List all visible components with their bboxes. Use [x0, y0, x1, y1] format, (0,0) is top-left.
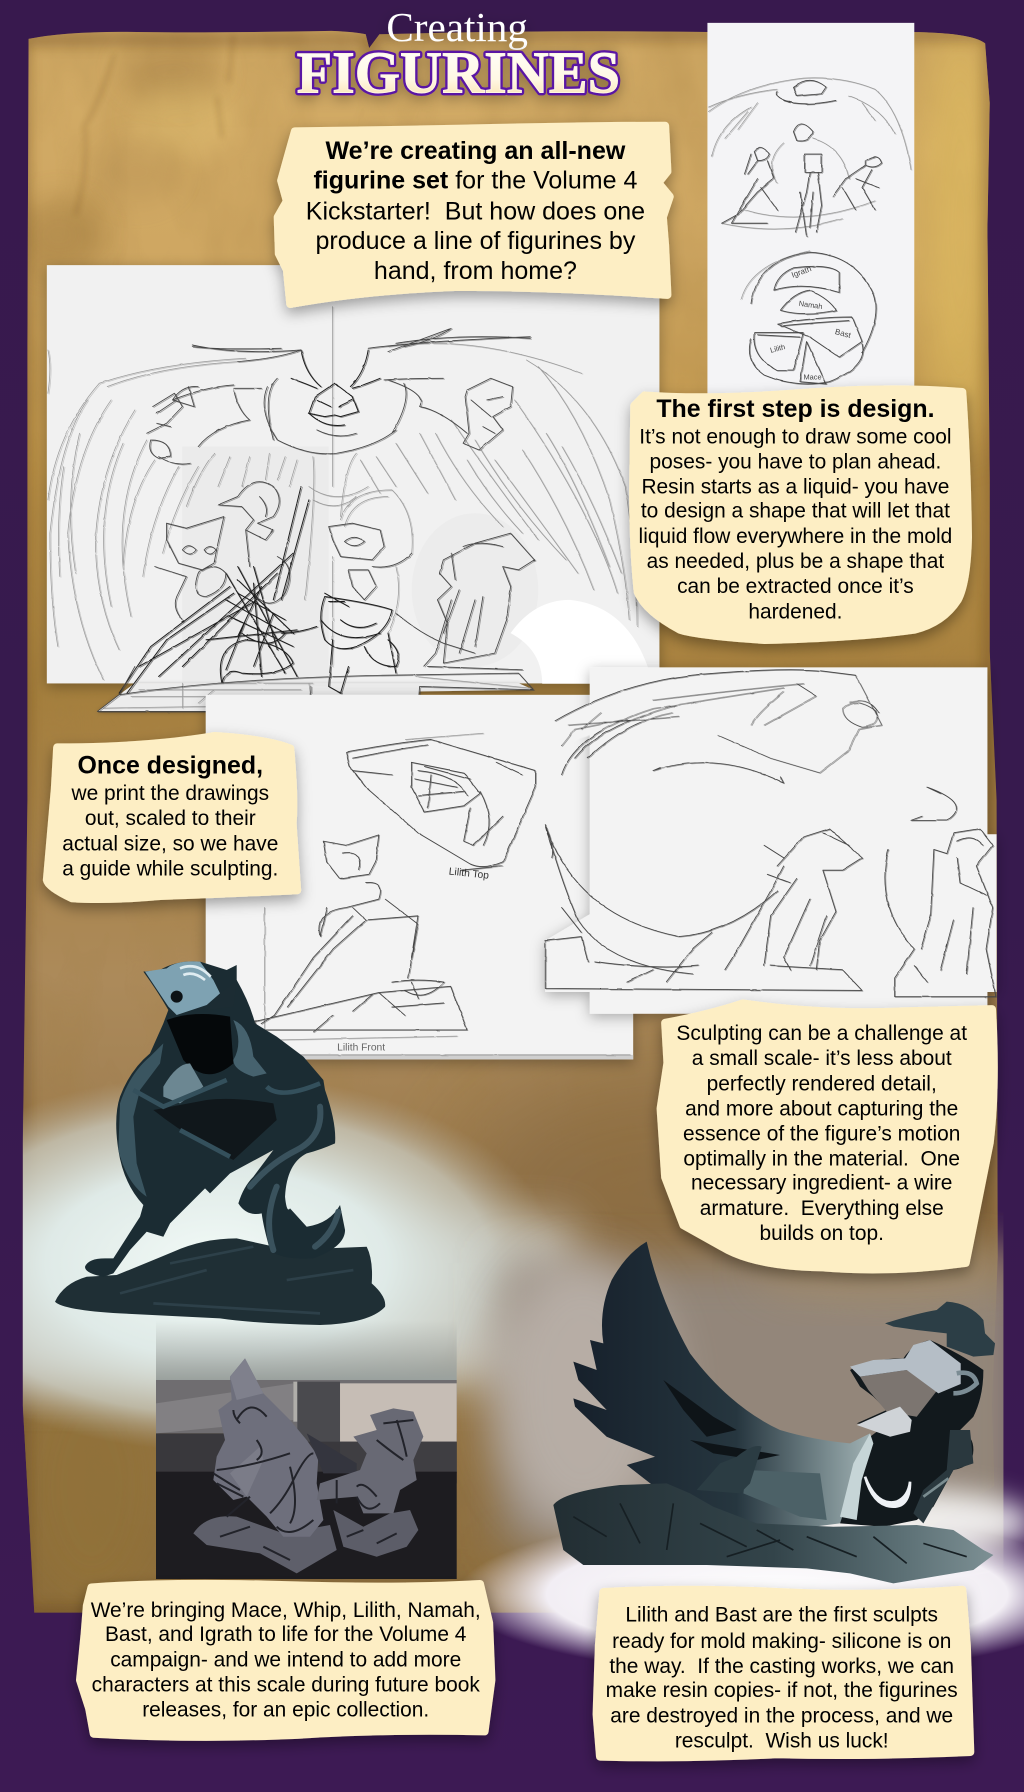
callout: once designed: out, scaled to their [85, 807, 256, 830]
callout: first step is design: as needed, plus be a shape that [647, 550, 944, 573]
sketch sheet: tall overview [707, 23, 914, 395]
sketch sheet: tall overview: Bast [834, 327, 853, 340]
sketch sheet: tall overview: Lilith [769, 342, 786, 355]
grey sculpt: right figure [317, 1408, 423, 1557]
sketch sheet: Lilith top and front: Lilith Front [337, 1042, 385, 1053]
sketch sheet: tall overview: Mace [804, 372, 822, 381]
title line: FIGURINES: FIGURINES [297, 40, 620, 106]
head [885, 1302, 995, 1357]
wing reference cut-out [555, 670, 882, 773]
sketch sheet: Lilith top and front [206, 695, 633, 1059]
callout: first sculpts ready: are destroyed in the process, and we [610, 1704, 953, 1727]
rear body [840, 1340, 983, 1527]
callout: sculpting: builds on top. [760, 1222, 884, 1245]
callout: once designed [47, 736, 297, 899]
callout: bringing characters to life [80, 1584, 491, 1737]
callout: sculpting: essence of the figure’s motion [683, 1123, 960, 1146]
callout: once designed: Once designed, [78, 752, 263, 780]
sketch sheet: tall overview: Igrath [790, 264, 813, 280]
callout: first step is design: poses- you have to plan ahead. [650, 451, 941, 474]
callout: sculpting: a small scale- it’s less about [692, 1047, 952, 1070]
crossed leg [743, 1470, 827, 1520]
clay base [553, 1483, 993, 1583]
callout: once designed: we print the drawings [71, 782, 269, 805]
sketch sheet: group design [47, 265, 659, 724]
title line: FIGURINES: FIGURINES [297, 40, 620, 106]
callout: first sculpts ready: ready for mold making- silicone is on [612, 1630, 951, 1653]
photo glow: sculpt left backdrop [0, 1074, 571, 1451]
callout: first sculpts ready: make resin copies- if not, the figurines [606, 1679, 958, 1702]
callout: sculpting [661, 1003, 994, 1269]
callout: intro [278, 126, 670, 304]
shaded neck [167, 1014, 233, 1074]
horned head [291, 350, 380, 426]
sketch sheet: group design: Billing/Base [225, 702, 273, 714]
callout: sculpting: perfectly rendered detail, [707, 1072, 937, 1095]
sketch sheet: Lilith top and front: Lilith Top [448, 867, 490, 882]
title [297, 4, 620, 106]
title line: Creating: Creating [386, 4, 528, 50]
callout: first sculpts ready: Lilith and Bast are the first sculpts [625, 1604, 938, 1627]
callout: intro: hand, from home? [374, 257, 577, 285]
callout: intro: Kickstarter! But how does one [306, 197, 645, 225]
lit head [145, 961, 220, 1015]
sculpt: standing figure with base [55, 961, 385, 1325]
callout: bringing characters to life: Bast, and Igrath to life for the Volume 4 [105, 1623, 467, 1646]
callout: sculpting: and more about capturing the [685, 1097, 958, 1120]
lit arm [233, 1020, 267, 1077]
lit chest area [860, 1370, 940, 1417]
callout: first step is design [633, 389, 968, 640]
floor highlight under right sculpt [457, 1490, 1024, 1674]
sculpt: crouching figure with large wing [553, 1242, 995, 1583]
callout: sculpting: necessary ingredient- a wire [691, 1172, 952, 1195]
callout: bringing characters to life: characters at this scale during future book [92, 1673, 480, 1696]
callout: bringing characters to life: campaign- and we intend to add more [110, 1648, 461, 1671]
callout: bringing characters to life: We’re bringing Mace, Whip, Lilith, Namah, [91, 1599, 481, 1622]
callout: first step is design: Resin starts as a liquid- you have [641, 476, 949, 499]
sketch sheet: tall overview: Namah [798, 299, 823, 311]
callout: once designed: a guide while sculpting. [62, 857, 278, 880]
hand and arm highlights [857, 1407, 912, 1437]
callout: intro: We’re creating an all-new [326, 137, 626, 165]
photo glow: sculpt right backdrop [491, 1240, 1024, 1549]
callout: bringing characters to life: releases, for an epic collection. [142, 1699, 429, 1722]
grey sculpt: left figure [193, 1358, 357, 1573]
callout: sculpting: Sculpting can be a challenge at [676, 1022, 967, 1045]
callout: sculpting: armature. Everything else [700, 1197, 944, 1220]
callout: first step is design: It’s not enough to draw some cool [639, 425, 952, 448]
tail [250, 1107, 338, 1250]
callout: first sculpts ready [597, 1590, 970, 1757]
clay body [85, 961, 345, 1277]
callout: intro: produce a line of figurines by [316, 227, 636, 255]
photo: two sculpts on countertop [156, 1320, 457, 1579]
callout: first step is design: The first step is design. [656, 395, 935, 423]
callout: first step is design: to design a shape that will let that [641, 500, 950, 523]
wing [573, 1242, 870, 1532]
photo backdrop [156, 1320, 457, 1579]
callout: first sculpts ready: the way. If the casting works, we can [609, 1655, 954, 1678]
callout: first step is design: hardened. [748, 600, 843, 623]
callout: first step is design: liquid flow everywhere in the mold [639, 525, 952, 548]
callout: once designed: actual size, so we have [62, 832, 278, 855]
base cut-out [97, 683, 533, 723]
callout: intro: figurine set for the Volume 4 [313, 167, 637, 195]
callout: sculpting: optimally in the material. One [683, 1148, 960, 1171]
callout: first sculpts ready: resculpt. Wish us luck! [675, 1729, 889, 1752]
tail highlight [865, 1477, 910, 1507]
clay base [55, 1238, 385, 1325]
lit chest [163, 1063, 203, 1103]
callout: first step is design: can be extracted once it’s [677, 575, 914, 598]
sketch sheet: Bast side and front [545, 667, 997, 1014]
